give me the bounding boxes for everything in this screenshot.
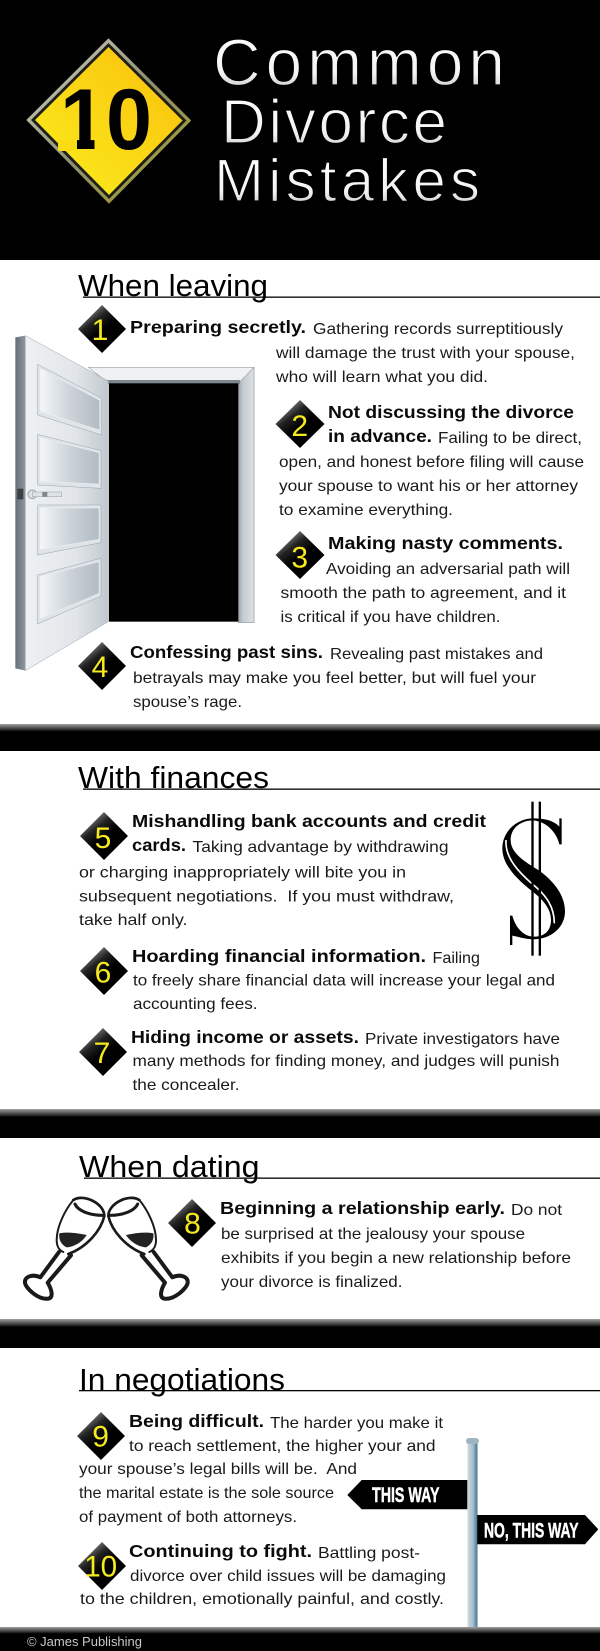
- text: item 4: Confessing past sins.: [130, 642, 323, 662]
- text: item 10: [80, 1541, 446, 1608]
- text: item 4: Revealing past mistakes and: [330, 646, 543, 663]
- icon: two wine glasses: [25, 1198, 188, 1299]
- text: item 6: Failing: [432, 950, 480, 967]
- text: item 6: Hoarding financial information.: [132, 946, 426, 966]
- item 3: [276, 531, 570, 626]
- icon: open door: [15, 336, 254, 671]
- copyright: © James Publishing: [27, 1634, 142, 1649]
- item 6: [80, 946, 555, 1013]
- title: Divorce: [221, 88, 447, 157]
- text: item 1: Preparing secretly.: [130, 317, 306, 337]
- panel: with finances: [78, 760, 600, 1094]
- left glass: [25, 1198, 104, 1299]
- heading: when leaving: When leaving: [78, 268, 268, 303]
- text: item 9: your spouse’s legal bills will be. And: [79, 1461, 357, 1478]
- item 5: [79, 811, 486, 929]
- text: item 5: take half only.: [79, 912, 188, 929]
- title: Mistakes: [214, 147, 480, 214]
- text: item 4: betrayals may make you feel better, but will fuel your: [133, 670, 537, 687]
- footer bar: [0, 1627, 600, 1651]
- text: item 5: or charging inappropriately will bite you in: [79, 864, 406, 882]
- icon: badge 4: [78, 642, 126, 690]
- icon: badge 10: [78, 1542, 126, 1590]
- item 9: [77, 1411, 444, 1526]
- text: item 8: be surprised at the jealousy your spouse: [221, 1226, 525, 1243]
- heading: when dating: When dating: [79, 1149, 260, 1184]
- icon: badge 3: [276, 531, 324, 579]
- item 2: [276, 400, 584, 519]
- heading: with finances: With finances: [78, 760, 269, 795]
- text: item 9: to reach settlement, the higher your and: [129, 1438, 436, 1455]
- title: Common: [213, 25, 505, 99]
- text: item 7: the concealer.: [132, 1077, 240, 1094]
- icon: badge 9: [77, 1412, 125, 1460]
- icon: badge 10: 10: [84, 1551, 117, 1584]
- text: item 3: Making nasty comments.: [328, 533, 563, 553]
- icon: badge 7: 7: [94, 1037, 110, 1070]
- item 10: [78, 1541, 446, 1608]
- icon: badge 5: [80, 812, 128, 860]
- text: item 10: Continuing to fight.: [129, 1541, 312, 1561]
- text: item 8: your divorce is finalized.: [221, 1274, 402, 1291]
- text: item 9: the marital estate is the sole source: [79, 1485, 334, 1502]
- text: item 8: Do not: [511, 1202, 563, 1219]
- title: [213, 25, 505, 214]
- text: item 2: Failing to be direct,: [438, 430, 582, 447]
- item 1: [78, 305, 575, 386]
- text: item 2: Not discussing the divorce: [328, 402, 574, 422]
- text: item 3: smooth the path to agreement, and it: [280, 585, 567, 602]
- text: item 2: in advance.: [328, 426, 432, 446]
- icon: yellow road sign with 10: [27, 39, 190, 203]
- text: item 2: open, and honest before filing will cause: [279, 454, 584, 471]
- text: item 2: your spouse to want his or her attorney: [279, 478, 578, 495]
- text: item 9: Being difficult.: [129, 1411, 264, 1431]
- text: item 4: spouse’s rage.: [133, 694, 242, 711]
- icon: badge 4: 4: [92, 651, 108, 684]
- text: item 7: many methods for finding money, and judges will punish: [132, 1053, 560, 1070]
- text: item 10: Battling post-: [318, 1545, 420, 1562]
- text: item 3: is critical if you have children.: [280, 609, 500, 626]
- icon: badge 2: 2: [291, 410, 308, 443]
- text: item 5: cards.: [132, 835, 186, 855]
- item 8: [168, 1198, 571, 1291]
- text: item 6: [132, 946, 555, 1013]
- icon: badge 1: 1: [92, 314, 108, 347]
- text: item 5: Taking advantage by withdrawing: [192, 839, 448, 856]
- text: item 9: of payment of both attorneys.: [79, 1509, 297, 1526]
- text: item 6: accounting fees.: [133, 996, 258, 1013]
- right glass: [108, 1198, 188, 1299]
- panel: when dating: [25, 1149, 600, 1299]
- heading: in negotiations: In negotiations: [79, 1362, 285, 1397]
- text: item 8: exhibits if you begin a new relationship before: [221, 1250, 571, 1267]
- text: item 2: to examine everything.: [279, 502, 453, 519]
- text: item 8: [220, 1198, 571, 1291]
- icon: dollar sign: [502, 802, 565, 956]
- text: item 6: to freely share financial data will increase your legal and: [133, 972, 555, 990]
- text: item 3: [280, 533, 570, 626]
- text: item 5: [79, 811, 486, 929]
- sign: this way: [347, 1480, 467, 1509]
- text: item 7: [131, 1027, 560, 1094]
- icon: badge 8: 8: [184, 1208, 201, 1240]
- icon: badge 6: [80, 947, 128, 995]
- text: item 1: Gathering records surreptitiously: [313, 321, 563, 338]
- icon: signpost: [347, 1438, 598, 1627]
- icon: badge 1: [78, 305, 126, 353]
- icon: badge 2: [276, 400, 324, 448]
- text: item 9: [79, 1411, 444, 1526]
- icon: badge 6: 6: [95, 956, 111, 990]
- text: item 4: [130, 642, 543, 711]
- text: item 1: will damage the trust with your spouse,: [275, 345, 575, 362]
- icon: badge 7: [79, 1028, 127, 1076]
- item 4: [78, 642, 543, 711]
- text: item 10: to the children, emotionally painful, and costly.: [80, 1591, 444, 1608]
- text: item 7: Private investigators have: [365, 1031, 560, 1048]
- icon: badge 3: 3: [291, 542, 308, 574]
- text: item 1: who will learn what you did.: [275, 369, 488, 386]
- text: item 5: subsequent negotiations. If you must withdraw,: [79, 888, 454, 906]
- panel: in negotiations: [77, 1362, 600, 1627]
- text: item 5: Mishandling bank accounts and credit: [132, 811, 486, 831]
- text: item 7: Hiding income or assets.: [131, 1027, 359, 1047]
- text: item 9: The harder you make it: [270, 1415, 444, 1432]
- text: item 1: [130, 317, 575, 386]
- icon: badge 5: 5: [95, 822, 111, 855]
- icon: yellow road sign with 10: 10: [60, 72, 152, 168]
- sign: this way: THIS WAY: [372, 1484, 440, 1507]
- post: [468, 1441, 478, 1627]
- panel: when leaving: [15, 268, 600, 711]
- text: item 3: Avoiding an adversarial path will: [326, 561, 570, 578]
- icon: badge 8: [168, 1199, 216, 1247]
- item 7: [79, 1027, 560, 1094]
- icon: badge 9: 9: [92, 1421, 109, 1454]
- text: item 10: divorce over child issues will be damaging: [130, 1568, 446, 1585]
- text: item 2: [279, 402, 584, 519]
- text: item 8: Beginning a relationship early.: [220, 1198, 505, 1218]
- header banner: [0, 0, 600, 260]
